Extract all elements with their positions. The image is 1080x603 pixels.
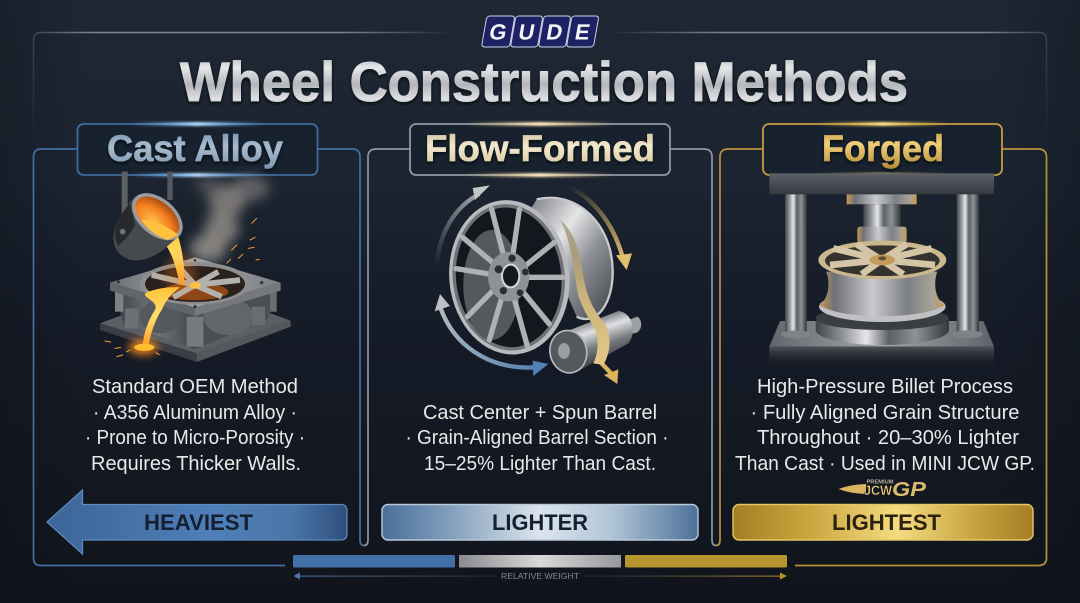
panel outline: cast alloy bbox=[34, 149, 364, 566]
description: flow-formed: · Grain-Aligned Barrel Section · bbox=[406, 427, 668, 449]
label: relative weight: RELATIVE WEIGHT bbox=[501, 571, 580, 581]
bar: gold segment bbox=[625, 555, 787, 568]
icon: wheel and spinning roller bbox=[435, 185, 641, 384]
description: flow-formed: Cast Center + Spun Barrel bbox=[423, 402, 657, 424]
heading: flow-formed bbox=[410, 122, 670, 177]
badge: lightest bbox=[733, 504, 1033, 540]
arrow badge: heaviest: HEAVIEST bbox=[144, 510, 253, 535]
title: Wheel Construction Methods bbox=[180, 50, 908, 113]
arrow: toward heavier bbox=[294, 572, 496, 580]
description: cast alloy bbox=[85, 376, 305, 475]
logo: GUDE badge: E bbox=[573, 20, 592, 44]
logo: premium JCW GP: PREMIUM bbox=[866, 480, 894, 486]
heading: cast alloy bbox=[78, 122, 318, 177]
panel outline: forged bbox=[716, 149, 1046, 566]
arrow badge: heaviest bbox=[47, 490, 347, 554]
logo: GUDE badge: G bbox=[487, 20, 509, 44]
description: forged bbox=[735, 376, 1035, 475]
heading: flow-formed: Flow-Formed bbox=[425, 128, 655, 169]
icon: forging press with wheel bbox=[769, 173, 994, 365]
description: flow-formed: 15–25% Lighter Than Cast. bbox=[424, 453, 656, 475]
description: forged: High-Pressure Billet Process bbox=[757, 376, 1013, 398]
logo: premium JCW GP: GP bbox=[892, 479, 927, 501]
logo: premium JCW GP: JCW bbox=[864, 482, 893, 498]
logo: GUDE badge bbox=[481, 16, 599, 47]
description: forged: Than Cast · Used in MINI JCW GP. bbox=[735, 453, 1035, 475]
heading: forged: Forged bbox=[822, 128, 944, 169]
icon: molten metal pouring into wheel mould bbox=[100, 172, 291, 362]
panel: flow-formed bbox=[364, 122, 716, 546]
description: cast alloy: · Prone to Micro-Porosity · bbox=[85, 427, 305, 449]
panel: cast alloy bbox=[34, 122, 364, 566]
badge: lightest: LIGHTEST bbox=[832, 510, 941, 535]
arrow: toward lighter bbox=[584, 572, 787, 580]
badge: lighter bbox=[382, 504, 698, 540]
bar: blue segment bbox=[293, 555, 455, 568]
logo: premium JCW GP bbox=[838, 479, 927, 501]
description: forged: · Fully Aligned Grain Structure bbox=[750, 402, 1020, 424]
heading: forged bbox=[763, 122, 1002, 177]
relative weight scale bbox=[293, 555, 787, 581]
bar: silver segment bbox=[459, 555, 621, 568]
description: cast alloy: · A356 Aluminum Alloy · bbox=[93, 402, 297, 424]
description: cast alloy: Requires Thicker Walls. bbox=[91, 453, 301, 475]
logo: GUDE badge: U bbox=[516, 20, 537, 44]
logo: GUDE badge: D bbox=[544, 20, 565, 44]
description: flow-formed bbox=[406, 402, 668, 475]
outer title frame bbox=[34, 32, 1046, 145]
description: forged: Throughout · 20–30% Lighter bbox=[757, 427, 1019, 449]
badge: lighter: LIGHTER bbox=[492, 510, 588, 535]
description: cast alloy: Standard OEM Method bbox=[92, 376, 298, 398]
panel: forged bbox=[716, 122, 1046, 566]
heading: cast alloy: Cast Alloy bbox=[107, 128, 283, 169]
panel outline: flow-formed bbox=[364, 149, 716, 546]
